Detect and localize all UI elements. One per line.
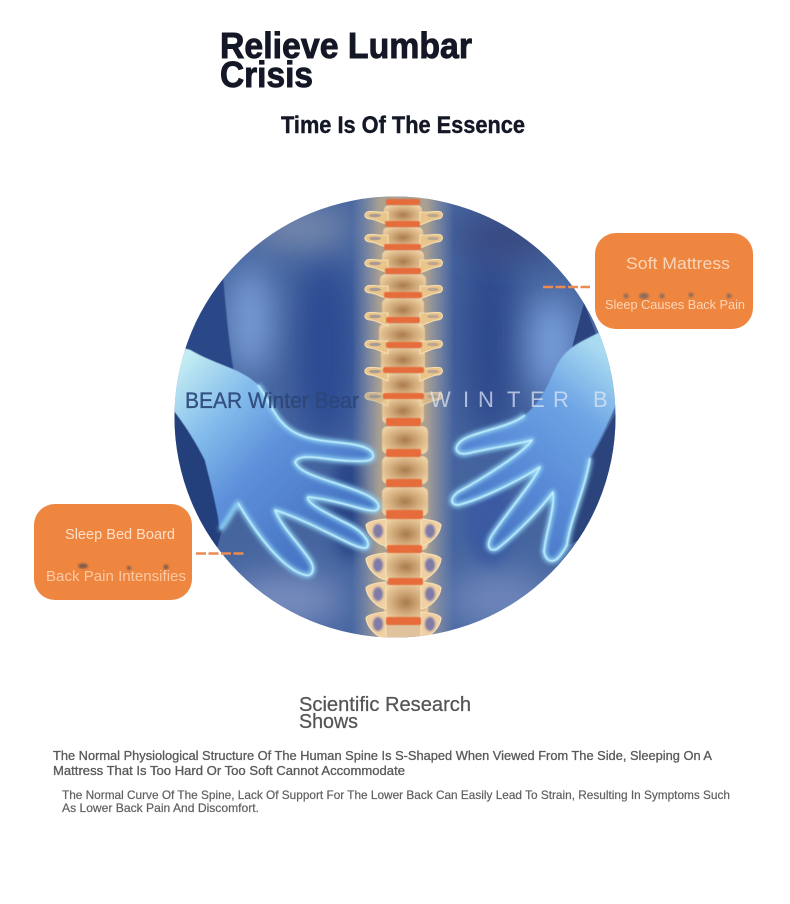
title: Relieve Lumbar bbox=[220, 25, 472, 66]
paragraph one bbox=[53, 749, 713, 778]
callout: sleep bed board: Back Pain Intensifies bbox=[46, 569, 186, 585]
dark areas beside the torso bbox=[170, 277, 625, 555]
title bbox=[220, 25, 472, 95]
subtitle: Time Is Of The Essence bbox=[281, 112, 525, 139]
callout: soft mattress: Soft Mattress bbox=[626, 255, 730, 273]
spine: transverse processes bbox=[365, 211, 442, 639]
watermark: WINTER B: WINTERB bbox=[430, 387, 608, 412]
spine bbox=[365, 199, 442, 639]
callout: sleep bed board bbox=[34, 504, 192, 600]
section heading bbox=[299, 693, 471, 733]
spine: discs bbox=[383, 199, 424, 625]
connector: soft mattress bbox=[543, 286, 590, 288]
paragraph two: The Normal Curve Of The Spine, Lack Of Support For The Lower Back Can Easily Lead To Strain, Resulting In Symptoms Such bbox=[62, 788, 730, 802]
paragraph two: As Lower Back Pain And Discomfort. bbox=[62, 801, 259, 815]
section heading: Scientific Research bbox=[299, 693, 471, 716]
background: back torso bbox=[170, 190, 620, 645]
right hand bbox=[452, 333, 618, 561]
section heading: Shows bbox=[299, 710, 358, 733]
callout: soft mattress: Sleep Causes Back Pain bbox=[605, 297, 745, 312]
spine and hands illustration bbox=[170, 190, 625, 645]
watermark: BEAR Winter Bear: BEAR Winter Bear bbox=[185, 388, 359, 413]
callout: soft mattress bbox=[595, 233, 753, 329]
paragraph one: The Normal Physiological Structure Of The Human Spine Is S-Shaped When Viewed From The Side, Sleeping On A bbox=[53, 749, 713, 763]
connector: sleep bed board bbox=[196, 552, 244, 555]
paragraph two bbox=[62, 788, 730, 815]
paragraph one: Mattress That Is Too Hard Or Too Soft Cannot Accommodate bbox=[53, 764, 405, 778]
callout: sleep bed board: Sleep Bed Board bbox=[65, 527, 175, 543]
title: Crisis bbox=[220, 54, 313, 95]
left hand bbox=[170, 345, 379, 575]
